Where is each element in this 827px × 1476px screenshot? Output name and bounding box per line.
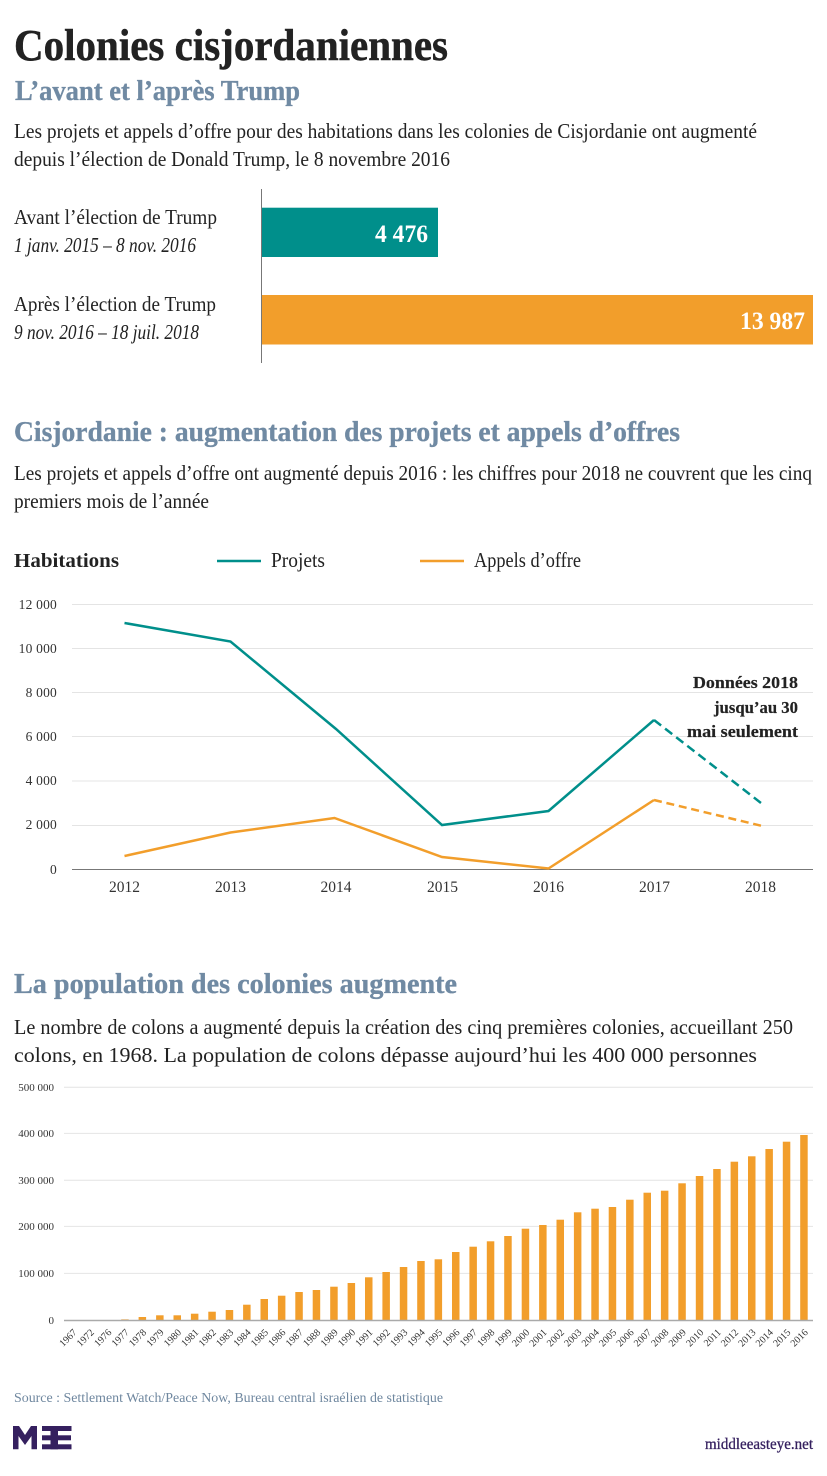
x axis labels: 2014: [754, 1327, 776, 1349]
x axis labels: 2004: [580, 1327, 602, 1349]
x axis labels: 1986: [266, 1327, 288, 1349]
x axis labels: 2008: [649, 1327, 671, 1349]
intro text: depuis l’élection de Donald Trump, le 8 novembre 2016: [14, 147, 450, 171]
source line: Source : Settlement Watch/Peace Now, Bureau central israélien de statistique: [14, 1390, 443, 1405]
label: after the election: [14, 292, 216, 344]
x axis labels: 2015: [771, 1327, 793, 1349]
x axis labels: 1978: [127, 1327, 149, 1349]
label: after the election: 9 nov. 2016 – 18 juil. 2018: [14, 320, 199, 344]
x axis labels: 2005: [597, 1327, 619, 1349]
x axis labels: 2011: [702, 1327, 724, 1349]
x axis labels: 2014: [320, 879, 352, 896]
x axis labels: 1976: [92, 1327, 114, 1349]
x axis labels: 1992: [371, 1327, 393, 1349]
x axis labels: 1996: [441, 1327, 462, 1349]
text: settler population description: [14, 1015, 793, 1067]
x axis labels: 2013: [737, 1327, 758, 1349]
callout: 2018 data note: Données 2018: [693, 673, 798, 692]
x axis labels: 1999: [493, 1327, 515, 1349]
x axis labels: 1982: [197, 1327, 219, 1349]
website: middleeasteye.net: [705, 1436, 814, 1453]
callout: 2018 data note: mai seulement: [687, 722, 798, 741]
y axis labels: 6 000: [26, 729, 57, 744]
label: after the election: Après l’élection de Trump: [14, 292, 216, 316]
x axis labels: 2016: [789, 1327, 811, 1349]
y axis labels: 500 000: [18, 1082, 54, 1094]
icon: MEE logo: [13, 1426, 72, 1449]
y axis labels: 400 000: [18, 1128, 54, 1140]
y axis labels: [19, 597, 57, 877]
callout: 2018 data note: [687, 673, 798, 741]
legend: Projets: [271, 548, 325, 572]
x axis labels: 2016: [533, 879, 564, 896]
y axis labels: 0: [50, 862, 57, 877]
y axis labels: [18, 1082, 54, 1327]
x axis labels: 2015: [427, 879, 458, 896]
x axis labels: 1995: [423, 1327, 445, 1349]
x axis labels: 2001: [528, 1327, 550, 1349]
y axis labels: 12 000: [19, 597, 57, 612]
x axis labels: 1981: [179, 1327, 201, 1349]
text: settler population description: Le nombre de colons a augmenté depuis la création des cinq premières colonies, accueillant 250: [14, 1015, 793, 1039]
text: projects and tenders description: premiers mois de l’année: [14, 489, 209, 513]
intro text: Les projets et appels d’offre pour des habitations dans les colonies de Cisjordanie ont augmenté: [14, 119, 757, 143]
bar: after 13 987: [262, 295, 813, 344]
bar: before 4 476: 4 476: [375, 221, 428, 248]
x axis labels: 1985: [249, 1327, 271, 1349]
x axis labels: 2012: [719, 1327, 741, 1349]
bar: before 4 476: [262, 208, 438, 257]
x axis labels: 2010: [684, 1327, 706, 1349]
x axis labels: 1977: [110, 1327, 132, 1349]
bars: [121, 1135, 808, 1320]
y axis labels: 8 000: [26, 685, 57, 700]
x axis labels: 2006: [615, 1327, 637, 1349]
x axis labels: 1979: [145, 1327, 167, 1349]
x axis labels: 1984: [232, 1327, 254, 1349]
bar: after 13 987: 13 987: [740, 308, 805, 335]
title: Colonies cisjordaniennes: [14, 21, 448, 70]
x axis labels: 1989: [319, 1327, 341, 1349]
x axis labels: 2018: [745, 879, 776, 896]
y axis labels: 4 000: [26, 773, 57, 788]
x axis labels: 2007: [632, 1327, 654, 1349]
y axis labels: 2 000: [26, 817, 57, 832]
legend: Appels d’offre: [474, 548, 581, 572]
text: projects and tenders description: [14, 461, 812, 513]
heading: projects and tenders: Cisjordanie : augmentation des projets et appels d’offres: [14, 416, 680, 448]
y axis labels: 200 000: [18, 1221, 54, 1233]
y axis labels: 100 000: [18, 1268, 54, 1280]
intro text: [14, 119, 757, 171]
label: before the election: 1 janv. 2015 – 8 nov. 2016: [14, 233, 196, 257]
x axis labels: 1990: [336, 1327, 358, 1349]
x axis labels: 1987: [284, 1327, 306, 1349]
line chart: [19, 597, 813, 896]
x axis labels: 1991: [354, 1327, 375, 1349]
text: settler population description: colons, en 1968. La population de colons dépasse aujourd’hui les 400 000 personnes: [14, 1043, 757, 1067]
bar chart: settler population: [18, 1082, 813, 1349]
x axis labels: 2000: [510, 1327, 532, 1349]
x axis labels: 1993: [388, 1327, 410, 1349]
x axis labels: 1994: [406, 1327, 428, 1349]
x axis labels: 2003: [562, 1327, 584, 1349]
x axis labels: 1997: [458, 1327, 480, 1349]
callout: 2018 data note: jusqu’au 30: [713, 698, 798, 717]
line: projects: [124, 623, 761, 825]
subtitle: L’avant et l’après Trump: [15, 75, 300, 107]
x axis labels: 2017: [639, 879, 670, 896]
x axis labels: 1988: [301, 1327, 323, 1349]
x axis labels: 2012: [109, 879, 140, 896]
x axis labels: 1967: [58, 1327, 79, 1349]
heading: settler population: La population des colonies augmente: [14, 968, 457, 1000]
legend: [14, 548, 581, 572]
y axis labels: 0: [48, 1315, 54, 1327]
x axis labels: 2009: [667, 1327, 689, 1349]
x axis labels: 1998: [475, 1327, 497, 1349]
line: tenders: [124, 800, 761, 868]
x axis labels: [109, 879, 776, 896]
x axis labels: 1980: [162, 1327, 184, 1349]
x axis labels: [58, 1327, 811, 1349]
label: before the election: Avant l’élection de Trump: [14, 205, 217, 229]
x axis labels: 1983: [214, 1327, 236, 1349]
y axis labels: 300 000: [18, 1175, 54, 1187]
label: before the election: [14, 205, 217, 257]
x axis labels: 2002: [545, 1327, 567, 1349]
legend: Habitations: [14, 550, 119, 572]
panel: before and after bar chart: [14, 189, 813, 363]
x axis labels: 1972: [75, 1327, 97, 1349]
y axis labels: 10 000: [19, 641, 57, 656]
x axis labels: 2013: [215, 879, 246, 896]
